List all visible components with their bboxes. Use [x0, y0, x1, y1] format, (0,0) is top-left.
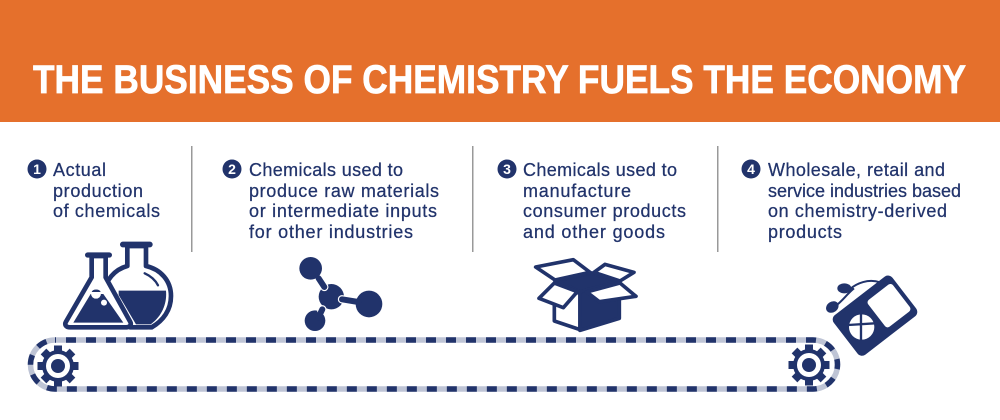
- conveyor belt: [29, 336, 838, 395]
- step 3 text block: manufacture: [523, 181, 631, 201]
- step 3 text block: Chemicals used to: [523, 160, 677, 180]
- step 2 text block: [222, 160, 439, 242]
- step 2 text block: or intermediate inputs: [249, 201, 437, 221]
- gear: left: [29, 337, 87, 395]
- gear: right: [780, 336, 838, 394]
- icon: open box: [536, 260, 636, 330]
- step 2 text block: Chemicals used to: [249, 160, 403, 180]
- icon: flasks: [65, 242, 171, 327]
- step 4 text block: 4: [747, 161, 755, 177]
- step 4 text block: products: [768, 222, 842, 242]
- step 2 text block: 2: [228, 161, 236, 177]
- icon: music player: [824, 273, 920, 358]
- step 4 text block: on chemistry-derived: [768, 201, 947, 221]
- step 3 text block: and other goods: [523, 222, 665, 242]
- step 3 text block: consumer products: [523, 201, 686, 221]
- step 4 text block: [742, 160, 961, 242]
- step 1 text block: 1: [33, 161, 41, 177]
- header band: [0, 0, 1000, 122]
- step 1 text block: Actual: [53, 160, 106, 180]
- step 2 text block: produce raw materials: [249, 181, 439, 201]
- step 1 text block: production: [53, 181, 143, 201]
- step 1 text block: of chemicals: [53, 201, 160, 221]
- step 1 text block: [28, 160, 160, 221]
- step 4 text block: Wholesale, retail and: [768, 160, 945, 180]
- icon: molecule: [299, 257, 382, 331]
- step 3 text block: 3: [503, 161, 511, 177]
- step 4 text block: service industries based: [768, 181, 961, 201]
- step 2 text block: for other industries: [249, 222, 413, 242]
- step 3 text block: [498, 160, 686, 242]
